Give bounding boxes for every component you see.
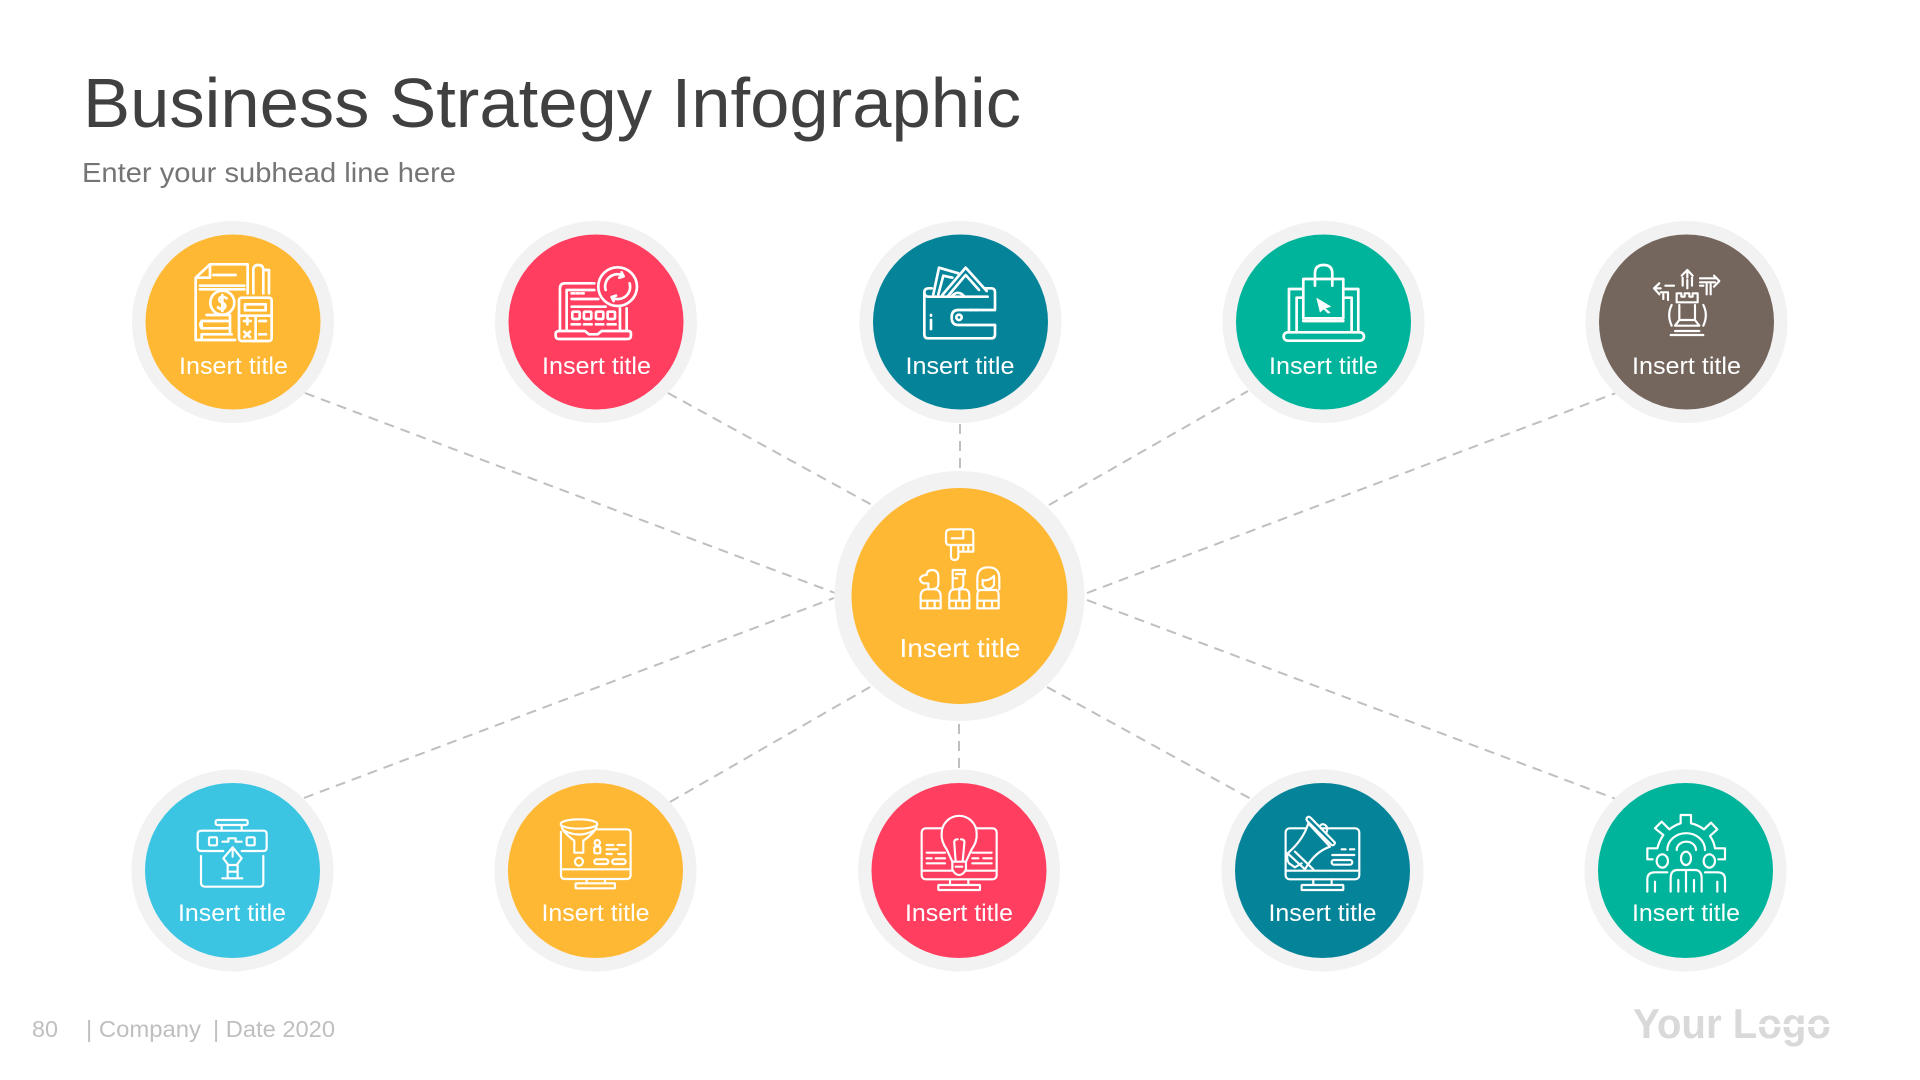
icon: light bulb on monitor — [922, 816, 997, 890]
node: top 5 brown — [1586, 221, 1788, 423]
subhead: Enter your subhead line here — [82, 157, 456, 188]
label: Insert title — [900, 633, 1020, 663]
icon: team under gear — [1647, 815, 1725, 892]
label: Insert title — [179, 353, 288, 380]
node: center yellow — [834, 471, 1084, 721]
icon: laptop with refresh — [556, 267, 637, 339]
label: Insert title — [1268, 900, 1376, 927]
icon: finance document and calculator — [196, 264, 272, 341]
node: bottom 1 cyan — [132, 770, 334, 972]
footer date: | Date 2020 — [213, 1016, 335, 1042]
label: Insert title — [178, 900, 286, 927]
icon: funnel on monitor — [561, 819, 631, 888]
icon: design toolkit — [198, 820, 267, 887]
label: Insert title — [1632, 353, 1741, 380]
label: Insert title — [542, 353, 651, 380]
icon: paint roller over team — [920, 529, 999, 608]
node: top 2 red — [495, 221, 697, 423]
icon: shopping bag on laptop — [1284, 265, 1364, 341]
logo: Your Logo — [1633, 1000, 1831, 1047]
footer page number: 80 — [32, 1016, 58, 1042]
node: bottom 4 teal — [1222, 770, 1424, 972]
node: bottom 5 green — [1584, 770, 1786, 972]
dashed connectors — [304, 391, 1616, 802]
title: Business Strategy Infographic — [83, 64, 1021, 142]
node: top 4 green — [1222, 221, 1424, 423]
label: Insert title — [542, 900, 650, 927]
label: Insert title — [905, 900, 1013, 927]
node: bottom 2 yellow — [494, 770, 696, 972]
node: bottom 3 red — [858, 770, 1060, 972]
label: Insert title — [1632, 900, 1740, 927]
footer company: | Company — [86, 1016, 202, 1042]
icon: chess rook with arrows — [1654, 270, 1719, 335]
icon: wallet — [924, 268, 995, 338]
label: Insert title — [906, 353, 1014, 380]
label: Insert title — [1269, 353, 1378, 380]
node: top 1 yellow — [132, 221, 334, 423]
icon: megaphone on monitor — [1286, 817, 1359, 890]
node: top 3 teal — [860, 221, 1062, 423]
